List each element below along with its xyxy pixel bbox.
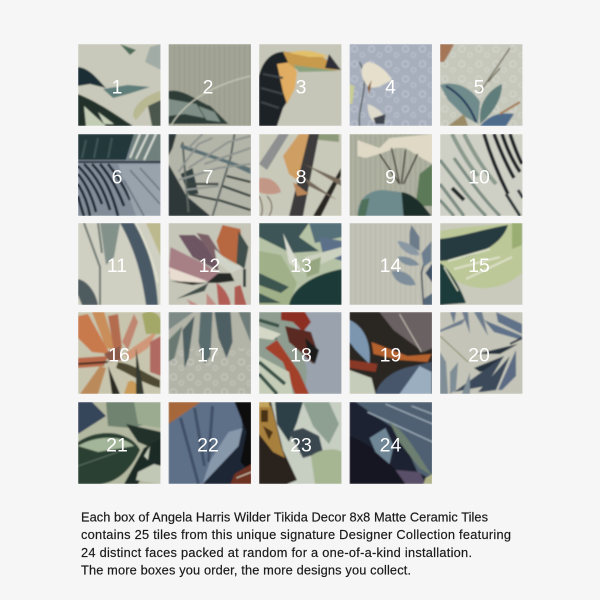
number 14: 14 (380, 255, 401, 277)
number 20: 20 (468, 344, 490, 366)
tile 19 (350, 312, 432, 394)
tile 15 (440, 223, 523, 305)
tile 20 (440, 312, 523, 394)
tile 3 (259, 44, 342, 126)
number 11: 11 (107, 255, 127, 277)
tile 22 (168, 402, 252, 484)
tile 14 (350, 223, 432, 305)
tile 10 (440, 134, 523, 216)
number 24: 24 (380, 434, 401, 456)
tile 17 (168, 312, 252, 394)
caption text block: 24 distinct faces packed at random for a one-of-a-kind installation. (81, 545, 472, 560)
tile 16 (78, 312, 161, 394)
tile 8 (259, 134, 342, 216)
tile 12 (168, 223, 252, 305)
number 6: 6 (112, 166, 122, 188)
tile 1 (78, 44, 161, 126)
tile 13 (259, 223, 342, 305)
tile 7 (168, 134, 252, 216)
tile 4 (350, 44, 432, 126)
number 22: 22 (197, 434, 219, 456)
number 2: 2 (203, 76, 213, 98)
number 16: 16 (108, 344, 130, 366)
number 23: 23 (290, 434, 312, 456)
number 15: 15 (468, 255, 490, 277)
tile 24 (350, 402, 432, 484)
caption text block: contains 25 tiles from this unique signature Designer Collection featuring (81, 527, 511, 542)
caption text block: Each box of Angela Harris Wilder Tikida Decor 8x8 Matte Ceramic Tiles (81, 510, 488, 524)
tile 6 (78, 134, 161, 216)
number 1: 1 (112, 76, 122, 98)
tile 5 (440, 44, 523, 126)
number 13: 13 (290, 255, 312, 277)
number 5: 5 (474, 76, 485, 98)
caption text block: The more boxes you order, the more designs you collect. (81, 562, 411, 577)
tile 18 (259, 312, 342, 394)
number 10: 10 (468, 166, 490, 188)
number 12: 12 (199, 255, 220, 277)
tile 11 (78, 223, 161, 305)
number 19: 19 (380, 344, 401, 366)
tile 9 (350, 134, 432, 216)
number 7: 7 (203, 166, 213, 188)
tile 21 (78, 402, 161, 484)
number 4: 4 (385, 76, 396, 98)
tile 2 (168, 44, 252, 126)
tile 23 (259, 402, 342, 484)
number 17: 17 (197, 344, 219, 366)
caption text block (81, 510, 511, 577)
number 8: 8 (296, 166, 306, 188)
number 3: 3 (296, 76, 306, 98)
number 18: 18 (290, 344, 312, 366)
number 9: 9 (385, 166, 396, 188)
number 21: 21 (106, 434, 128, 456)
